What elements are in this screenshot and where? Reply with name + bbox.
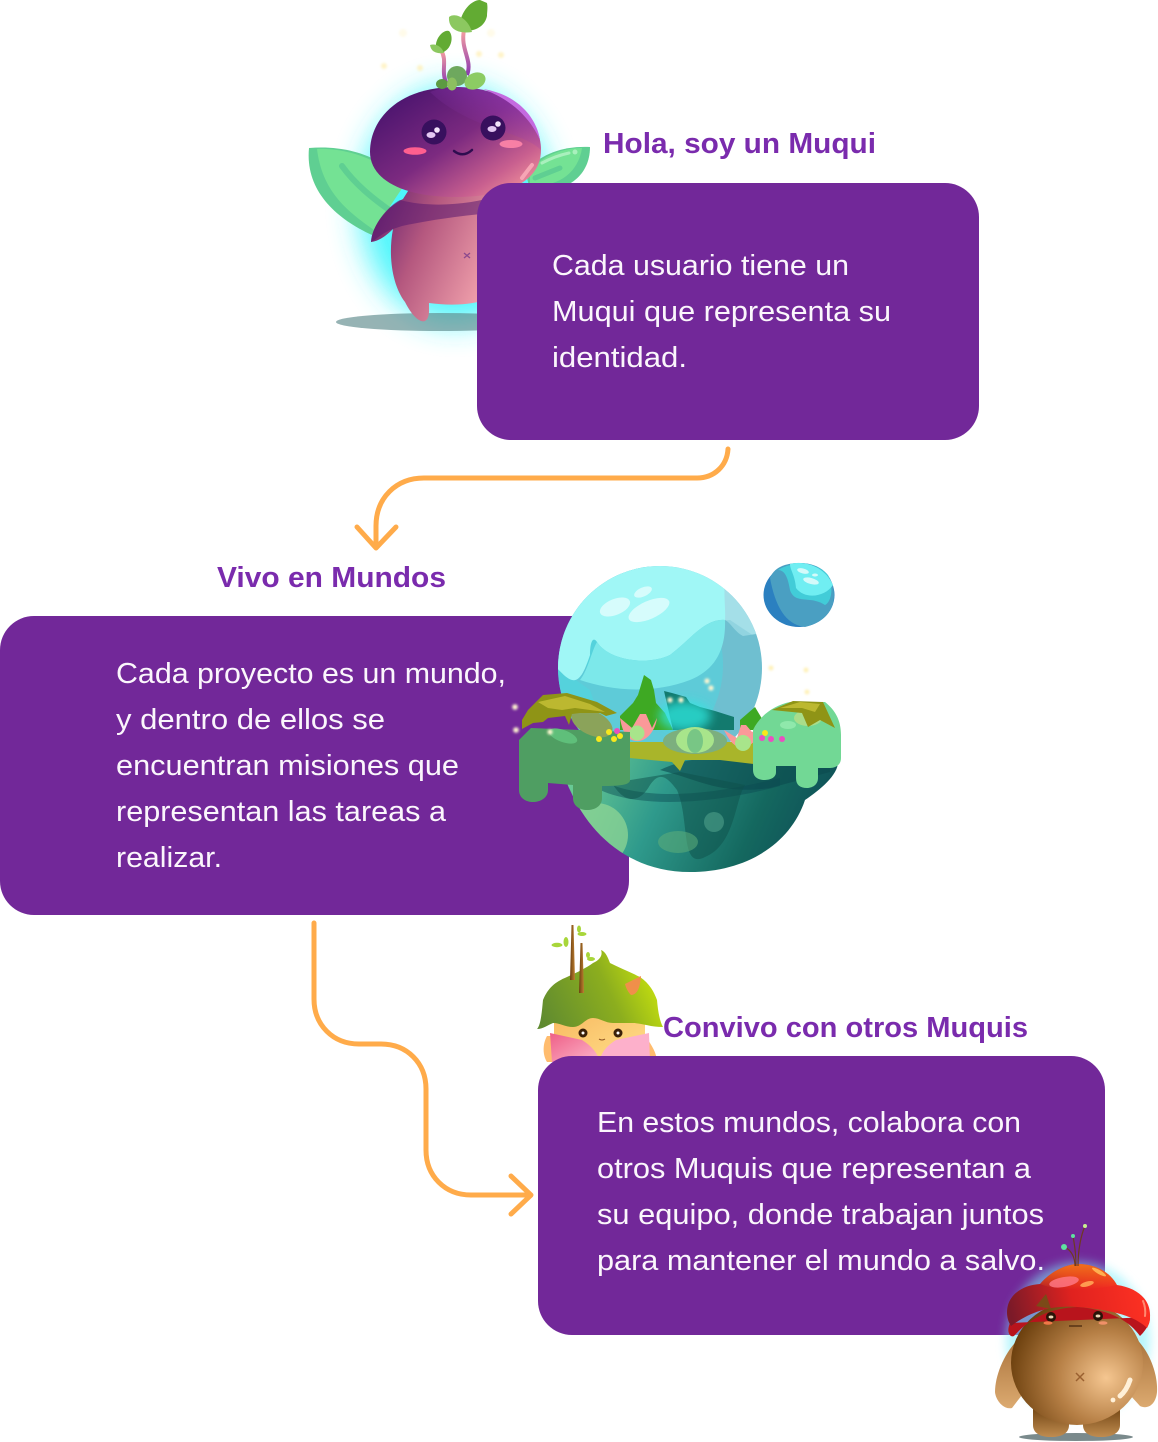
icon: left drip moss — [519, 693, 630, 810]
text block: Convivo description: para mantener el mundo a salvo. — [597, 1245, 1045, 1277]
panel: Convivo card — [538, 1056, 1105, 1335]
icon: green leaf cap — [537, 950, 663, 1029]
icon: cheeks and smile — [404, 140, 532, 258]
heading: Convivo con otros Muquis: Convivo con otros Muquis — [663, 1012, 1028, 1044]
icon: small planet — [764, 563, 834, 627]
icon: red mushroom cap — [1007, 1264, 1150, 1336]
head — [370, 87, 541, 197]
text block: Convivo description — [597, 1107, 1045, 1277]
body — [371, 180, 495, 321]
text block: Mundos description: Cada proyecto es un mundo, — [116, 658, 506, 690]
text block: Muqui description: Muqui que representa su — [552, 296, 891, 328]
icon: ground shadow — [1019, 1433, 1133, 1441]
icon: planet hemisphere — [568, 758, 838, 872]
icon: sprout leaves — [430, 0, 488, 93]
icon: feet — [1033, 1405, 1120, 1437]
text block: Mundos description: y dentro de ellos se — [116, 704, 385, 736]
icon: flower dots — [596, 728, 785, 742]
panel: Muqui card — [477, 183, 979, 440]
text block: Mundos description: realizar. — [116, 842, 222, 874]
body — [1011, 1301, 1143, 1425]
text block: Mundos description: representan las tareas a — [116, 796, 447, 828]
character: purple Muqui — [309, 0, 590, 331]
icon: right leaf wing — [525, 147, 590, 191]
text block: Muqui description — [552, 250, 891, 374]
icon: arms — [995, 1336, 1157, 1408]
icon: trees on cap — [552, 925, 595, 993]
text block: Convivo description: su equipo, donde trabajan juntos — [597, 1199, 1044, 1231]
text block: Muqui description: Cada usuario tiene un — [552, 250, 849, 282]
icon: glass bubble — [558, 566, 762, 742]
icon: left leaf wing — [309, 147, 405, 235]
text block: Convivo description: otros Muquis que representan a — [597, 1153, 1032, 1185]
icon: face — [1044, 1311, 1130, 1402]
icon: island surface and plants — [620, 675, 764, 771]
icon: sparkles — [381, 29, 504, 71]
text block: Muqui description: identidad. — [552, 342, 687, 374]
icon: antennae — [1061, 1224, 1087, 1266]
text block: Mundos description: encuentran misiones que — [116, 750, 459, 782]
icon: sparkles — [512, 666, 809, 735]
text block: Convivo description: En estos mundos, colabora con — [597, 1107, 1021, 1139]
arrow: Mundos to Convivo — [314, 923, 531, 1214]
text block: Mundos description — [116, 658, 506, 874]
heading: Hola, soy un Muqui: Hola, soy un Muqui — [603, 128, 876, 160]
arrow: Muqui to Mundos — [357, 449, 728, 548]
character: red-cap Muqui — [995, 1224, 1157, 1441]
icon: eyes — [422, 116, 506, 144]
icon: face — [578, 1028, 622, 1040]
icon: right drip moss — [753, 701, 841, 788]
character: green-cap Muqui — [537, 925, 663, 1062]
icon: ground shadow — [336, 313, 544, 331]
illustration: floating world — [512, 560, 845, 875]
heading: Vivo en Mundos: Vivo en Mundos — [217, 562, 446, 594]
panel: Mundos card — [0, 616, 629, 915]
icon: horn — [625, 976, 641, 995]
